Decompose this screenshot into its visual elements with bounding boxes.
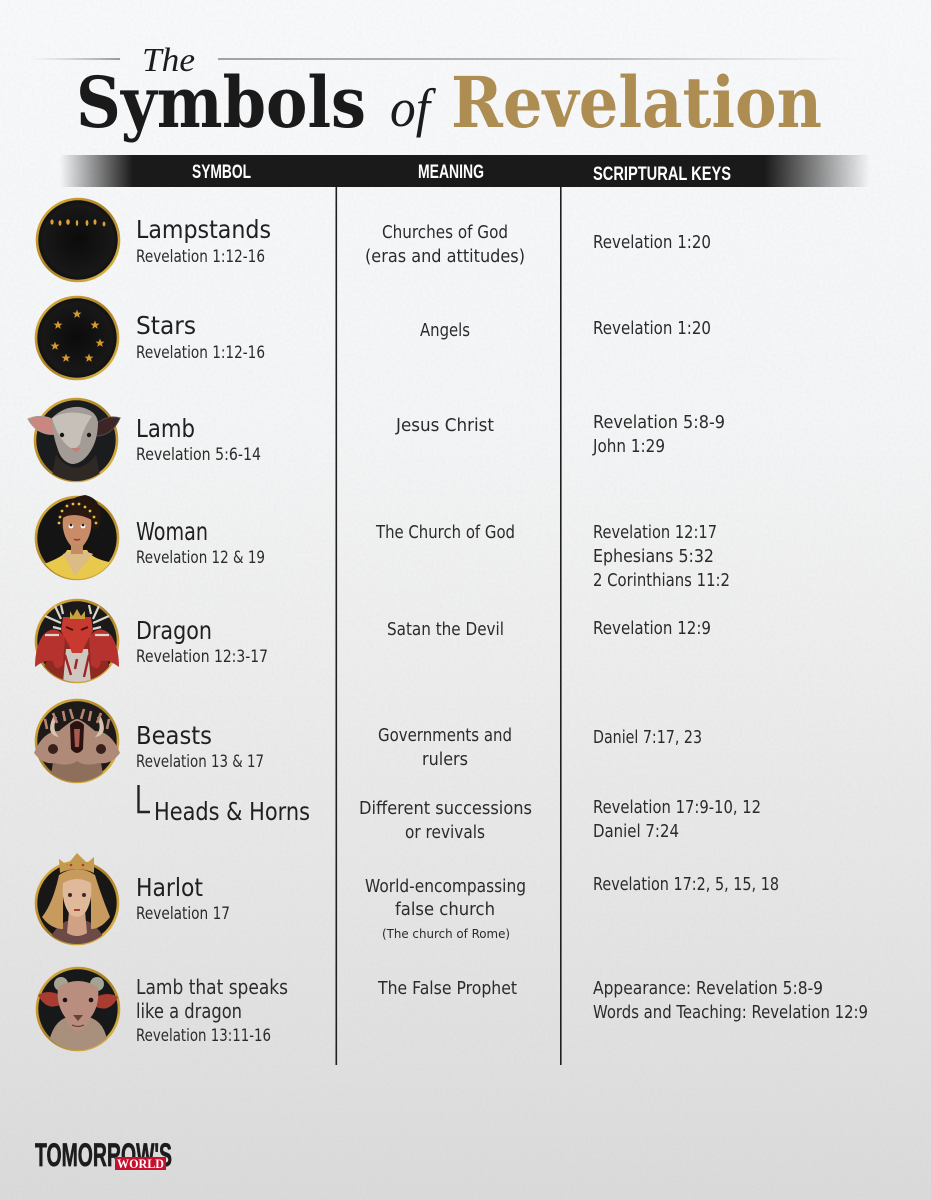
row: harlot: Revelation 17:2, 5, 15, 18 [593,874,779,895]
row: harlot [136,873,779,941]
row: harlot: Harlot [136,873,203,902]
row: lamb that speaks like a dragon: Appearance: Revelation 5:8-9 [593,978,823,999]
row: lampstands: Churches of God [382,222,508,243]
row: dragon: Dragon [136,616,212,645]
row: woman: Revelation 12 & 19 [136,548,265,567]
logo: Tomorrow's World: WORLD [117,1156,164,1171]
row: stars: Revelation 1:20 [593,318,711,339]
row: dragon [136,616,711,666]
row: lamb: Revelation 5:8-9 [593,412,725,433]
column dividers [336,187,562,1065]
row: heads and horns: or revivals [405,822,485,843]
title: Symbols [76,61,366,144]
icon: lampstands [37,199,119,281]
row: lamb that speaks like a dragon: The False Prophet [377,978,517,999]
row: harlot: World-encompassing [365,876,526,897]
icon: dragon [35,600,119,686]
row: beasts: Daniel 7:17, 23 [593,727,702,748]
icon: harlot [36,853,118,945]
row: lampstands [136,215,711,267]
row: stars: Angels [420,320,470,341]
row: woman [136,517,730,591]
icon: lamb [28,399,120,485]
title: The [142,42,195,79]
row: lamb: Lamb [136,414,195,443]
row: lamb: Jesus Christ [395,415,494,436]
logo: Tomorrow's World: TOMORROW'S [35,1137,172,1173]
row: dragon: Revelation 12:9 [593,618,711,639]
row: stars [136,311,711,362]
row: woman: Revelation 12:17 [593,522,717,543]
row: beasts: rulers [422,749,468,770]
row: lamb that speaks like a dragon: Lamb that speaks [136,975,288,999]
row: heads and horns [359,797,761,843]
row: woman: Woman [136,517,208,546]
row: lamb that speaks like a dragon: Words and Teaching: Revelation 12:9 [593,1002,868,1023]
row: lamb: Revelation 5:6-14 [136,445,261,464]
row: lampstands: Revelation 1:20 [593,232,711,253]
row: beasts [136,721,702,771]
row: lampstands: Lampstands [136,215,271,244]
row: lamb that speaks like a dragon: Revelation 13:11-16 [136,1026,271,1045]
row: harlot: false church [395,899,495,920]
row: lampstands: Revelation 1:12-16 [136,247,265,266]
row: beasts: Beasts [136,721,212,750]
row: dragon: Satan the Devil [387,619,504,640]
icon: stars [36,297,118,379]
title: Revelation [451,61,822,144]
icon: beasts [34,700,120,786]
title [30,42,860,144]
row: lamb [136,412,725,464]
row: stars: Revelation 1:12-16 [136,343,265,362]
title: of [390,78,437,138]
row: beasts: Revelation 13 & 17 [136,752,264,771]
table header bar: MEANING [418,162,484,183]
row: woman: Ephesians 5:32 [593,546,714,567]
icon: lamb that speaks like a dragon [37,968,119,1054]
row: beasts: Governments and [378,725,512,746]
logo: Tomorrow's World [35,1137,172,1173]
row: heads and horns: Different successions [359,798,532,819]
row: harlot: (The church of Rome) [382,927,510,941]
heads and horns label [138,785,310,826]
row: lamb that speaks like a dragon [136,975,868,1045]
row: dragon: Revelation 12:3-17 [136,647,268,666]
row: heads and horns: Daniel 7:24 [593,821,679,842]
row: lampstands: (eras and attitudes) [365,246,525,267]
row: woman: The Church of God [375,522,515,543]
row: harlot: Revelation 17 [136,904,230,923]
table header bar [60,155,870,187]
icon: woman [36,495,118,583]
heads and horns label: Heads & Horns [154,797,310,826]
table header bar: SCRIPTURAL KEYS [593,164,731,185]
table header bar: SYMBOL [192,162,251,183]
row: lamb that speaks like a dragon: like a dragon [136,999,242,1023]
row: stars: Stars [136,311,196,340]
row: woman: 2 Corinthians 11:2 [593,570,730,591]
row: heads and horns: Revelation 17:9-10, 12 [593,797,761,818]
row: lamb: John 1:29 [592,436,665,457]
